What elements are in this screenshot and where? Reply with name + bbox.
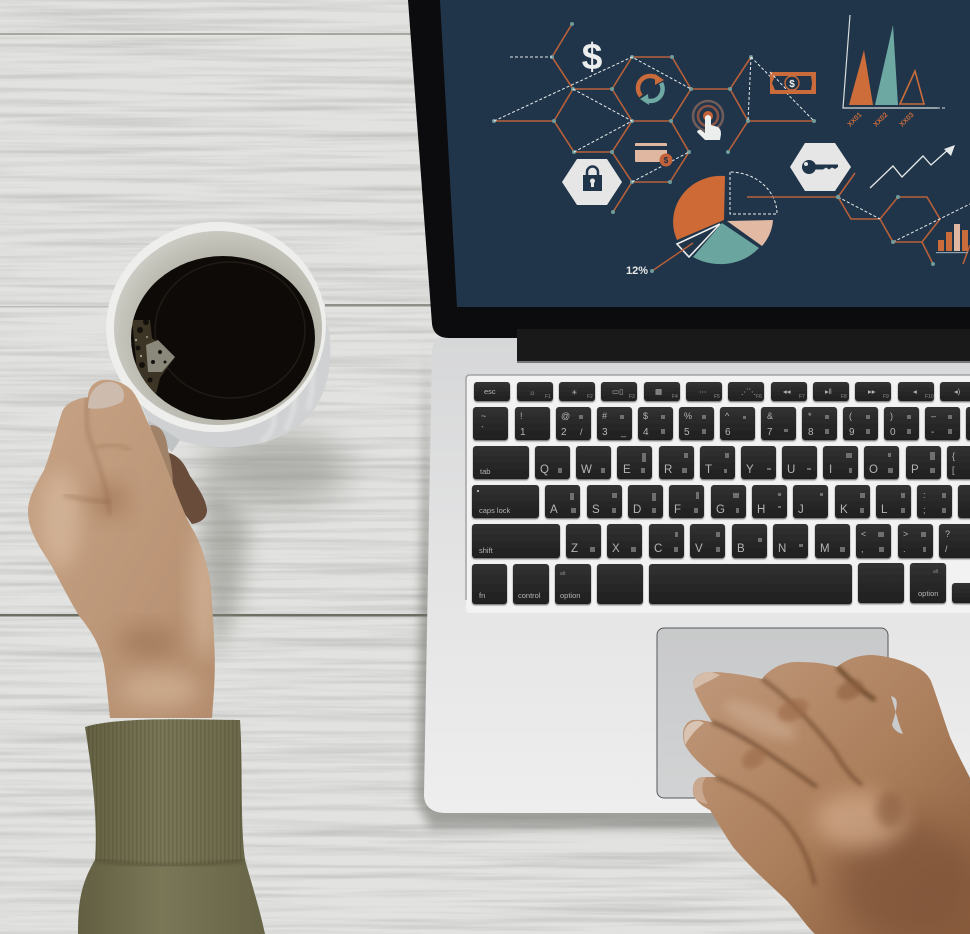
back fingers: [160, 452, 207, 524]
QWERTY row: Y: [746, 464, 754, 476]
ZXCV row: <: [861, 529, 866, 539]
QWERTY row: I: [829, 464, 832, 476]
trackpad: [657, 628, 888, 798]
function row: F5: [714, 394, 720, 400]
icon: banknote: $: [789, 79, 795, 90]
mug rim: [92, 208, 340, 446]
QWERTY row: P: [911, 464, 919, 476]
triangle chart: XX01: [847, 111, 864, 129]
hinge: [517, 329, 970, 363]
number row: /: [580, 427, 583, 437]
laptop shadow on desk: [416, 345, 970, 830]
function row: F3: [629, 394, 635, 400]
ASDF row: J: [798, 504, 804, 516]
ZXCV row: ?: [945, 529, 950, 539]
left hand holding mug: [28, 380, 219, 718]
icon: touch hand: [693, 101, 723, 140]
keyboard keys: [472, 382, 970, 604]
ASDF row: H: [757, 504, 765, 516]
bottom row: alt: [933, 569, 939, 575]
right hand on trackpad: [683, 655, 970, 934]
ZXCV row: X: [612, 543, 620, 555]
ASDF row: A: [550, 504, 558, 516]
function row: esc: [484, 387, 496, 396]
number row: ^: [725, 411, 730, 421]
ASDF row: caps lock: [479, 506, 511, 515]
function row: ▸‖: [825, 387, 832, 396]
number row: 6: [725, 427, 731, 438]
number row: 7: [767, 427, 773, 438]
icon: credit card with coin: $: [664, 156, 669, 165]
number row: –: [931, 411, 936, 421]
screen bezel: [408, 0, 970, 338]
function row: ▦: [655, 387, 662, 396]
ZXCV row: .: [903, 544, 906, 554]
triangle chart: XX03: [899, 111, 916, 129]
ZXCV row: >: [903, 529, 908, 539]
hand shading: [40, 382, 219, 708]
coffee mug: [106, 222, 330, 448]
icon: banknote: [770, 72, 816, 98]
QWERTY row: W: [581, 464, 592, 476]
ZXCV row: V: [695, 543, 703, 555]
icon: credit card with coin: [635, 143, 672, 166]
mug inner wall: [114, 231, 322, 425]
number row: (: [849, 411, 852, 421]
hand shadow on desk: [200, 480, 250, 660]
icon: dollar sign: $: [582, 36, 603, 77]
function row: F2: [587, 394, 593, 400]
function row: ⋯: [699, 387, 707, 396]
hand: [28, 380, 215, 718]
ASDF row: D: [633, 504, 641, 516]
icon: key hexagon: [790, 143, 851, 191]
function row: ▭▯: [612, 387, 623, 396]
icon: sync arrows: [638, 74, 664, 105]
trend arrow: [870, 145, 955, 188]
function row: F1: [545, 394, 551, 400]
number row: 0: [890, 427, 896, 438]
right network: [747, 173, 970, 266]
ASDF row: S: [592, 504, 600, 516]
function row: [474, 382, 970, 401]
ZXCV row: M: [820, 543, 830, 555]
function row: F9: [883, 394, 889, 400]
QWERTY row: [473, 446, 970, 479]
QWERTY row: [: [952, 465, 955, 475]
pie chart: 12%: [626, 265, 648, 277]
sleeve: [78, 719, 265, 934]
QWERTY row: O: [869, 464, 878, 476]
ZXCV row: /: [945, 544, 948, 554]
ZXCV row: [472, 524, 970, 558]
number row: 1: [520, 427, 526, 438]
number row: ): [890, 411, 893, 421]
number row: *: [808, 411, 812, 421]
QWERTY row: T: [705, 464, 712, 476]
number row: ~: [481, 411, 486, 421]
number row: 9: [849, 427, 855, 438]
trackpad gap between fingers: [891, 696, 903, 734]
ASDF row: [472, 485, 970, 518]
cuff ribbing: [85, 719, 245, 865]
ZXCV row: Z: [571, 543, 578, 555]
function row: ☀: [571, 388, 578, 397]
mug body: [130, 270, 330, 447]
number row: @: [561, 411, 570, 421]
fingernails: [693, 672, 720, 690]
number row: %: [684, 411, 692, 421]
mug shadow: [200, 435, 350, 505]
keyboard well: [466, 375, 970, 613]
ZXCV row: shift: [479, 546, 494, 555]
number row: 4: [643, 427, 649, 438]
hand: [683, 655, 970, 934]
number row: _: [620, 427, 627, 437]
number row: 3: [602, 427, 608, 438]
bottom row: [472, 563, 970, 604]
triangle chart: XX02: [873, 111, 890, 129]
bottom row: option: [560, 591, 580, 600]
mug handle: [148, 420, 180, 452]
function row: F8: [841, 394, 847, 400]
number row: [473, 407, 970, 440]
pie chart: [626, 172, 777, 277]
bottom row: option: [918, 589, 938, 598]
function row: ◂◂: [783, 387, 791, 396]
laptop: [408, 0, 970, 813]
bottom row: fn: [479, 591, 485, 600]
function row: ▸▸: [868, 387, 876, 396]
function row: ☼: [529, 388, 536, 397]
coffee bubbles: [132, 320, 175, 394]
number row: `: [481, 425, 484, 435]
ZXCV row: B: [737, 543, 745, 555]
triangle chart: [843, 15, 947, 129]
hexagon network: [492, 22, 816, 214]
screen: [440, 0, 970, 307]
number row: 5: [684, 427, 690, 438]
ASDF row: F: [674, 504, 681, 516]
bottom row: alt: [560, 571, 566, 577]
laptop base: [424, 338, 970, 813]
QWERTY row: Q: [540, 464, 549, 476]
ZXCV row: ,: [861, 544, 864, 554]
function row: ◂): [954, 387, 961, 396]
function row: ⋰⋱: [741, 387, 756, 396]
number row: !: [520, 411, 523, 421]
bar chart: [936, 224, 968, 253]
ASDF row: K: [840, 504, 848, 516]
function row: F10: [925, 394, 934, 400]
ZXCV row: N: [778, 543, 786, 555]
number row: #: [602, 411, 607, 421]
function row: F7: [799, 394, 805, 400]
QWERTY row: E: [623, 464, 631, 476]
ZXCV row: C: [654, 543, 662, 555]
hand shading and finger detail: [684, 667, 970, 934]
QWERTY row: R: [664, 464, 672, 476]
icon: lock hexagon: [562, 159, 622, 205]
function row: F6: [756, 394, 762, 400]
ASDF row: ;: [923, 505, 926, 515]
ASDF row: :: [923, 490, 926, 500]
number row: 2: [561, 427, 567, 438]
QWERTY row: U: [787, 464, 795, 476]
screen graphics: [492, 15, 970, 277]
thumbnail: [88, 382, 124, 409]
QWERTY row: {: [952, 451, 955, 461]
QWERTY row: tab: [480, 467, 490, 476]
ASDF row: G: [716, 504, 725, 516]
number row: &: [767, 411, 773, 421]
Thai legend marks on keys: [558, 415, 952, 552]
number row: $: [643, 411, 648, 421]
bottom row: control: [518, 591, 541, 600]
function row: ◂: [913, 387, 917, 396]
number row: -: [931, 427, 934, 438]
number row: 8: [808, 427, 814, 438]
coffee: [131, 256, 315, 420]
function row: F4: [672, 394, 678, 400]
ASDF row: L: [881, 504, 888, 516]
